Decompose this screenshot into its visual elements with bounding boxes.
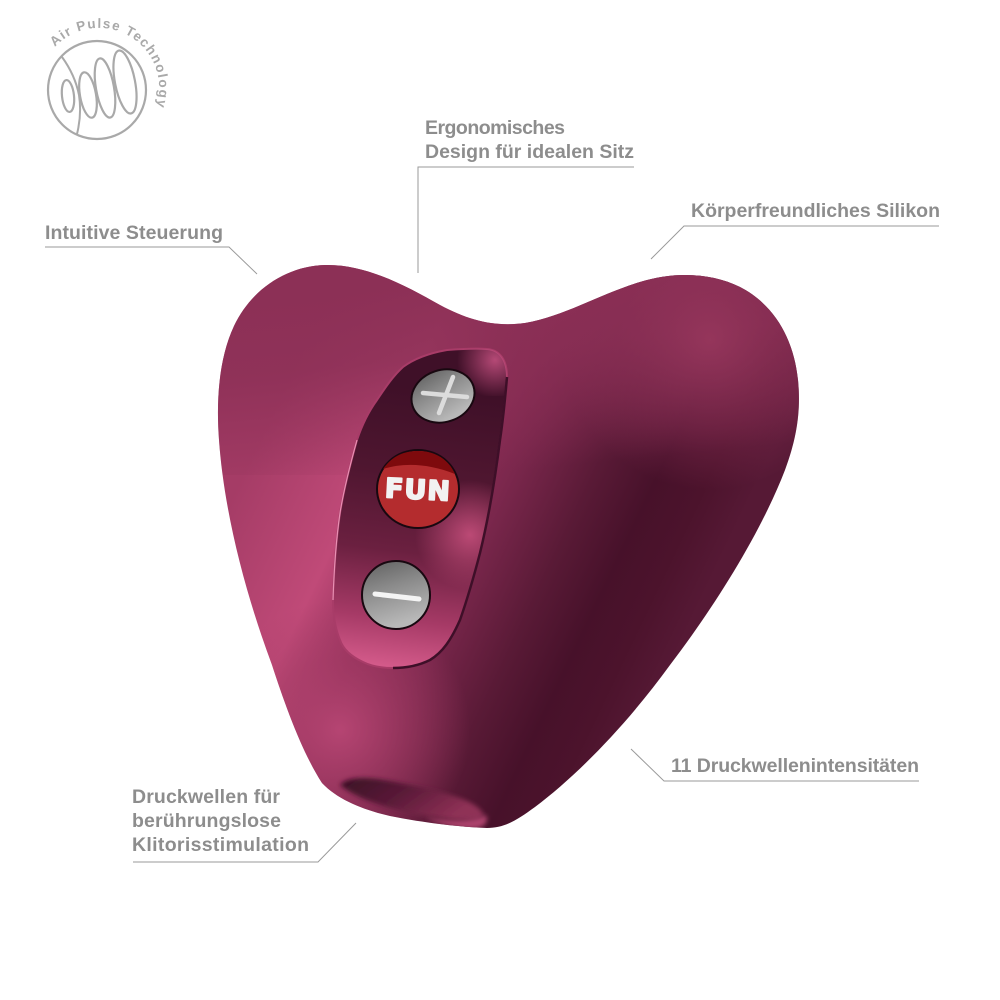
label: Körperfreundliches Silikon: [651, 200, 940, 259]
air opening: [340, 778, 487, 829]
label: Druckwellen für berührungslose Klitorisstimulation: Klitorisstimulation: [132, 834, 309, 856]
button: FUN: FUN: [384, 473, 452, 508]
label: Ergonomisches Design: Design für idealen Sitz: [425, 141, 634, 163]
label: 11 Druckwellenintensitäten: 11 Druckwellenintensitäten: [671, 755, 919, 777]
logo: Air Pulse Technology: Air Pulse Technology: [51, 18, 168, 108]
button: plus: [405, 361, 481, 431]
label: Intuitive Steuerung: Intuitive Steuerung: [45, 222, 223, 244]
control panel: [332, 348, 508, 670]
button: FUN: [377, 450, 459, 528]
label: Körperfreundliches Silikon: Körperfreundliches Silikon: [691, 200, 940, 222]
label: Druckwellen für berührungslose Klitorisstimulation: Druckwellen für: [132, 786, 280, 808]
label: Intuitive Steuerung: [45, 222, 257, 274]
label: Ergonomisches Design: [418, 117, 634, 273]
label: Druckwellen für berührungslose Klitorisstimulation: berührungslose: [132, 810, 281, 832]
label: Druckwellen für berührungslose Klitorisstimulation: [132, 786, 356, 862]
label: Ergonomisches Design: Ergonomisches: [425, 117, 565, 139]
product: heart-shaped device: [218, 265, 799, 828]
button: minus: [362, 561, 430, 629]
label: 11 Druckwellenintensitäten: [631, 749, 919, 781]
